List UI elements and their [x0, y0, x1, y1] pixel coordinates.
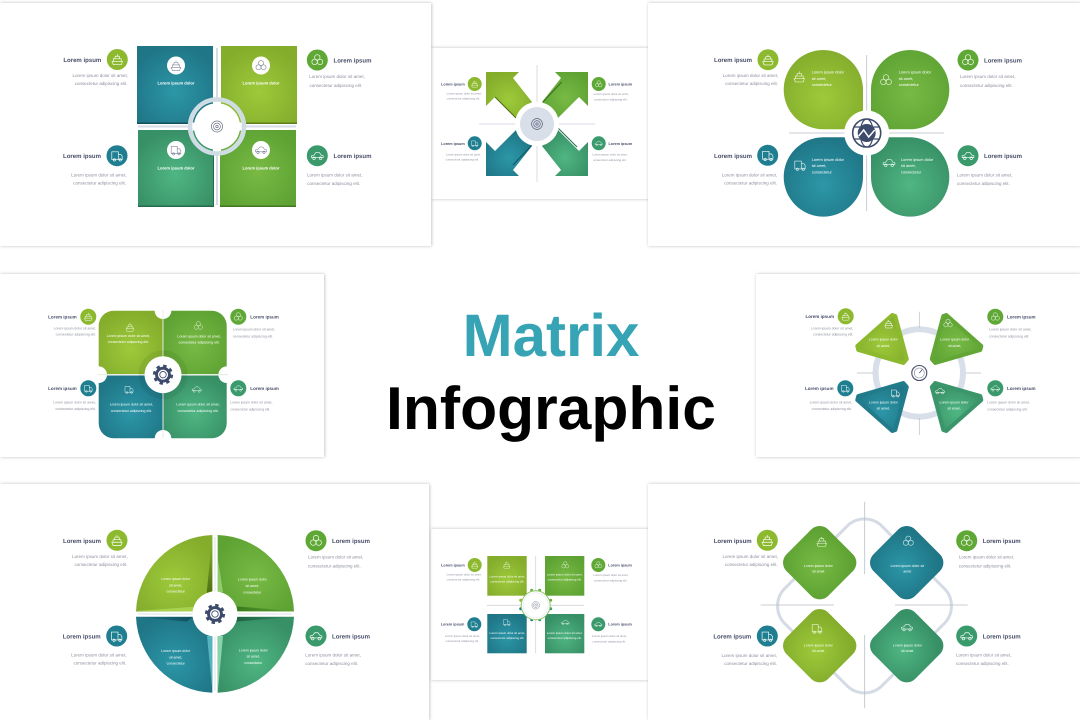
label: bottom right: consectetur adipiscing elit.: [593, 158, 627, 162]
block: teal bottom left: Lorem ipsum dolor sit amet,: [110, 402, 153, 406]
block: green top right: [164, 311, 227, 374]
square: green bottom right: [220, 130, 296, 207]
block: lime top left: Lorem ipsum dolor sit amet,: [107, 334, 150, 338]
block: lime top left: [99, 311, 162, 374]
petal: lime top left: [784, 50, 863, 129]
quadrant: lime top left: Lorem ipsum dolor: [161, 577, 191, 581]
label: bottom left: Lorem ipsum: [441, 623, 465, 627]
square: top left: Lorem ipsum dolor sit amet,: [489, 574, 525, 578]
arrow diagram: [486, 72, 588, 176]
triangle: teal bottom left: Lorem ipsum dolor: [869, 400, 899, 404]
label: top right: Lorem ipsum: [608, 82, 633, 86]
label: top right: consectetur adipiscing elit.: [310, 83, 362, 88]
label: bottom left: Lorem ipsum dolor sit amet,: [446, 152, 481, 156]
label: bottom left: consectetur adipiscing elit.: [724, 661, 777, 666]
quadrant: mint bottom right: consectetur: [244, 661, 263, 665]
label: top left: consectetur adipiscing elit.: [813, 332, 853, 336]
label: top right: [592, 77, 633, 102]
label: bottom left: consectetur adipiscing elit.: [55, 407, 96, 411]
diamond: mint bottom right: sit amet: [901, 649, 913, 653]
label: bottom right: Lorem ipsum dolor sit amet,: [987, 400, 1030, 404]
label: top right: Lorem ipsum: [984, 58, 1022, 64]
label: top left: Lorem ipsum: [441, 563, 465, 567]
square: teal top left: Lorem ipsum dolor: [157, 80, 195, 86]
axis lines: [479, 65, 595, 182]
label: top left: consectetur adipiscing elit.: [56, 332, 96, 336]
label: top left: consectetur adipiscing elit.: [447, 578, 480, 582]
block: teal bottom left: consectetur adipiscing elit.: [111, 409, 152, 413]
label: top right: Lorem ipsum: [1007, 314, 1036, 320]
diamond: lime bottom left: Lorem ipsum dolor: [804, 644, 834, 648]
quadrant: green top right: sit amet,: [246, 584, 259, 588]
square: teal top left: [137, 46, 213, 124]
label: bottom left: Lorem ipsum dolor sit amet,: [722, 172, 777, 178]
block: mint bottom right: [164, 376, 227, 438]
quadrant: mint bottom right: sit amet,: [247, 655, 260, 659]
label: top right: Lorem ipsum: [983, 538, 1021, 545]
triangle: lime top left: [857, 315, 907, 363]
petal: mint bottom right: Lorem ipsum dolor: [901, 157, 934, 162]
label: top left: Lorem ipsum dolor sit amet,: [723, 73, 778, 78]
label: bottom right: [230, 380, 279, 412]
triangle: green top right: Lorem ipsum dolor: [940, 338, 970, 342]
petal: mint bottom right: [871, 137, 949, 217]
frame and axis lines: [761, 502, 968, 708]
label: top left: Lorem ipsum dolor sit amet,: [447, 92, 482, 96]
center ring: [138, 48, 296, 205]
label: top left: consectetur adipiscing elit.: [75, 81, 128, 86]
label: top left: Lorem ipsum: [441, 82, 465, 86]
triangle: lime top left: Lorem ipsum dolor: [869, 338, 899, 342]
label: top right: Lorem ipsum dolor sit amet,: [959, 554, 1014, 560]
label: bottom right: Lorem ipsum: [608, 623, 633, 627]
label: bottom right: consectetur adipiscing elit.: [592, 640, 626, 644]
label: top left: consectetur adipiscing elit.: [725, 81, 778, 86]
label: bottom right: Lorem ipsum dolor sit amet,: [592, 634, 627, 638]
label: top left: Lorem ipsum dolor sit amet,: [447, 572, 482, 576]
petal: lime top left: sit amet,: [812, 76, 826, 81]
label: top right: [958, 50, 1022, 88]
quadrant: green top right: [218, 535, 294, 612]
label: bottom right: Lorem ipsum: [983, 634, 1021, 641]
label: bottom left: [713, 626, 778, 666]
label: top right: [591, 558, 633, 582]
title: [386, 302, 716, 442]
petal: mint bottom right: consectetur: [901, 170, 922, 174]
square: bottom right: consectetur adipiscing elit.: [548, 636, 582, 640]
axis lines: [789, 55, 944, 211]
title: Matrix: [463, 302, 639, 369]
label: top left: Lorem ipsum: [63, 538, 101, 545]
label: top right: consectetur adipiscing elit.: [308, 564, 361, 568]
label: top right: consectetur adipiscing elit.: [594, 578, 628, 582]
label: bottom right: consectetur adipiscing elit.: [987, 408, 1028, 412]
triangle: teal bottom left: sit amet,: [877, 406, 890, 410]
label: top right: Lorem ipsum dolor sit amet,: [309, 74, 365, 79]
quadrant: teal bottom left: sit amet,: [169, 655, 182, 659]
square: bottom left: [487, 614, 527, 653]
panel: notched rounded matrix with gear: [0, 274, 324, 457]
label: bottom right: consectetur adipiscing elit.: [956, 661, 1009, 666]
quadrant: teal bottom left: [136, 617, 212, 693]
label: bottom right: Lorem ipsum dolor sit amet,: [957, 172, 1013, 178]
label: top left: Lorem ipsum: [63, 57, 101, 64]
square: top right: consectetur adipiscing elit.: [548, 578, 582, 582]
triangle: green top right: [932, 315, 981, 363]
label: top right: Lorem ipsum: [250, 314, 279, 320]
label: top left: Lorem ipsum: [714, 538, 752, 545]
petal: green top right: consectetur: [899, 82, 920, 87]
label: top right: consectetur adipiscing elit.: [233, 334, 273, 338]
triangle: mint bottom right: Lorem ipsum dolor: [940, 400, 969, 404]
label: top right: Lorem ipsum dolor sit amet,: [594, 573, 629, 577]
label: top right: consectetur adipiscing elit.: [960, 83, 1013, 88]
square: bottom left: consectetur adipiscing elit.: [490, 636, 524, 640]
label: top right: Lorem ipsum: [334, 58, 371, 64]
label: bottom right: Lorem ipsum dolor sit amet,: [956, 652, 1012, 658]
label: bottom right: Lorem ipsum dolor sit amet,: [307, 172, 363, 178]
label: bottom left: consectetur adipiscing elit.: [73, 180, 126, 186]
label: bottom right: Lorem ipsum: [984, 153, 1022, 160]
label: bottom left: consectetur adipiscing elit.: [446, 639, 479, 643]
quadrant: mint bottom right: Lorem ipsum dolor: [239, 648, 269, 652]
label: bottom left: Lorem ipsum dolor sit amet,: [445, 634, 480, 638]
label: bottom left: [48, 380, 96, 411]
petal: green top right: [871, 50, 949, 129]
center gear: [138, 537, 292, 691]
notches and cross lines: [90, 302, 235, 447]
petal: teal bottom left: Lorem ipsum dolor: [812, 157, 845, 162]
square: mint bottom left: Lorem ipsum dolor: [157, 166, 195, 170]
label: bottom left: Lorem ipsum dolor sit amet,: [53, 400, 96, 404]
quadrant: lime top left: sit amet,: [169, 583, 182, 587]
label: bottom right: Lorem ipsum: [250, 386, 279, 391]
square: lime top right: Lorem ipsum dolor: [242, 80, 280, 86]
diamond: green top left: [778, 521, 861, 604]
square: top right: Lorem ipsum dolor sit amet,: [547, 572, 583, 576]
label: bottom left: [63, 145, 128, 186]
square: top left: consectetur adipiscing elit.: [490, 580, 524, 584]
label: top left: Lorem ipsum: [805, 314, 834, 319]
label: top right: [306, 530, 370, 568]
label: bottom left: Lorem ipsum: [714, 153, 752, 160]
label: top right: Lorem ipsum: [608, 563, 633, 567]
label: bottom right: consectetur adipiscing elit.: [230, 408, 270, 412]
label: top left: [714, 49, 778, 86]
label: top right: Lorem ipsum dolor sit amet,: [594, 92, 629, 96]
label: bottom right: Lorem ipsum: [1007, 386, 1036, 391]
center globe: [844, 110, 889, 156]
petal: teal bottom left: [784, 137, 863, 217]
label: bottom right: [307, 145, 371, 186]
label: bottom right: consectetur adipiscing elit.: [957, 181, 1010, 186]
axis lines: [487, 556, 584, 653]
diamond: lime bottom left: [778, 604, 861, 687]
triangle: green top right: sit amet,: [948, 344, 961, 348]
label: top left: [441, 558, 482, 582]
label: top right: consectetur adipiscing elit.: [959, 564, 1011, 568]
diamond: green top left: sit amet: [812, 570, 824, 574]
diamond: mint bottom right: Lorem ipsum dolor: [893, 644, 923, 648]
label: bottom right: consectetur adipiscing elit.: [305, 661, 358, 666]
label: top left: Lorem ipsum dolor sit amet,: [54, 326, 96, 330]
quadrant: lime top left: consectetur: [167, 590, 186, 594]
block: green top right: consectetur adipiscing elit.: [178, 340, 220, 344]
quadrant: green top right: Lorem ipsum dolor: [238, 578, 268, 582]
label: bottom left: Lorem ipsum: [63, 634, 101, 640]
petal: lime top left: consectetur: [812, 82, 833, 87]
block: mint bottom right: consectetur adipiscing elit.: [177, 409, 219, 413]
title: Infographic: [386, 374, 716, 442]
label: bottom right: Lorem ipsum: [334, 153, 371, 160]
label: bottom left: Lorem ipsum: [63, 153, 101, 160]
ring and axis ticks: [857, 312, 981, 435]
square: bottom right: Lorem ipsum dolor sit amet,: [547, 631, 583, 635]
label: top left: [63, 49, 128, 86]
label: bottom left: Lorem ipsum: [805, 386, 834, 391]
label: bottom left: [441, 617, 481, 643]
label: bottom left: [63, 626, 127, 666]
block: mint bottom right: Lorem ipsum dolor sit amet,: [176, 402, 220, 406]
petal: teal bottom left: sit amet,: [812, 163, 826, 168]
label: bottom right: [987, 380, 1036, 412]
label: top left: Lorem ipsum dolor sit amet,: [72, 73, 128, 78]
label: top right: [307, 50, 371, 88]
label: bottom left: Lorem ipsum dolor sit amet,: [71, 652, 127, 658]
block: green top right: Lorem ipsum dolor sit amet,: [177, 334, 221, 338]
label: bottom left: [714, 145, 778, 186]
label: bottom left: [805, 380, 853, 411]
quadrant: lime top left: [136, 535, 212, 612]
label: top right: Lorem ipsum dolor sit amet,: [960, 74, 1016, 79]
label: top left: Lorem ipsum: [48, 314, 77, 319]
quadrant: mint bottom right: [218, 617, 294, 693]
square: lime top right: [221, 46, 297, 124]
square: top right: [545, 556, 584, 596]
label: top right: consectetur adipiscing elit.: [594, 98, 628, 102]
label: top right: Lorem ipsum dolor sit amet,: [308, 554, 364, 560]
label: top left: Lorem ipsum dolor sit amet,: [811, 326, 853, 330]
triangle: mint bottom right: [932, 383, 981, 431]
petal: mint bottom right: sit amet,: [901, 163, 916, 168]
label: bottom left: Lorem ipsum: [441, 142, 465, 146]
block: teal bottom left: [99, 376, 162, 438]
diamond: lime bottom left: sit amet: [812, 649, 824, 653]
label: top left: consectetur adipiscing elit.: [447, 96, 480, 100]
label: bottom left: consectetur adipiscing elit.: [446, 158, 479, 162]
label: top left: [441, 77, 482, 100]
label: bottom right: consectetur adipiscing elit.: [307, 181, 360, 186]
label: top left: [48, 309, 96, 336]
label: top right: [956, 530, 1021, 568]
label: top right: Lorem ipsum: [332, 538, 370, 545]
label: bottom left: consectetur adipiscing elit.: [724, 180, 777, 186]
label: top left: consectetur adipiscing elit.: [725, 562, 778, 567]
triangle: lime top left: sit amet,: [877, 344, 890, 348]
label: top right: [230, 309, 279, 338]
label: bottom right: [305, 626, 370, 666]
diamond: teal top right: [865, 521, 948, 604]
triangle: teal bottom left: [857, 383, 907, 431]
petal: green top right: Lorem ipsum dolor: [899, 70, 932, 74]
label: bottom right: Lorem ipsum: [332, 634, 370, 641]
label: top right: [987, 309, 1036, 338]
label: top left: Lorem ipsum dolor sit amet,: [72, 554, 128, 559]
label: bottom right: [957, 145, 1022, 186]
square: top left: [487, 556, 527, 596]
label: top right: consectetur adipiscing elit.: [989, 334, 1029, 338]
label: top left: [63, 530, 128, 567]
label: bottom left: Lorem ipsum dolor sit amet,: [721, 653, 777, 658]
quadrant: green top right: consectetur: [243, 590, 262, 594]
label: bottom right: Lorem ipsum dolor sit amet,: [305, 652, 361, 658]
label: bottom left: Lorem ipsum: [48, 386, 77, 391]
square: bottom right: [545, 614, 584, 653]
square: green bottom right: Lorem ipsum dolor: [242, 166, 280, 170]
panel: small square gear slide: [431, 529, 648, 680]
label: bottom left: Lorem ipsum: [713, 634, 751, 640]
label: bottom right: Lorem ipsum dolor sit amet,: [230, 400, 272, 404]
label: top right: Lorem ipsum dolor sit amet,: [233, 328, 275, 332]
label: bottom left: [441, 136, 482, 162]
petal: teal bottom left: consectetur: [812, 170, 833, 174]
triangle: mint bottom right: sit amet,: [947, 406, 961, 410]
petal: green top right: sit amet,: [899, 76, 913, 81]
label: bottom right: Lorem ipsum dolor sit amet,: [592, 152, 628, 156]
panel: square matrix with ring: [0, 3, 431, 246]
petal: lime top left: Lorem ipsum dolor: [812, 70, 845, 74]
label: top left: [714, 530, 778, 567]
label: top left: consectetur adipiscing elit.: [75, 562, 127, 567]
panel: petal matrix with globe: [648, 3, 1080, 246]
label: bottom right: [592, 136, 633, 162]
label: top left: [805, 308, 854, 336]
square: mint bottom left: [138, 130, 214, 207]
label: top right: Lorem ipsum dolor sit amet,: [989, 328, 1031, 332]
diamond: teal top right: amet: [903, 570, 911, 574]
label: bottom left: consectetur adipiscing elit.: [74, 660, 126, 666]
label: bottom right: [956, 626, 1021, 666]
center gear: [138, 350, 188, 399]
block: lime top left: consectetur adipiscing elit.: [108, 340, 149, 344]
diamond: teal top right: Lorem ipsum dolor sit: [891, 564, 924, 568]
panel: diamond matrix with rounded frame: [648, 484, 1080, 720]
label: bottom left: consectetur adipiscing elit.: [812, 407, 852, 411]
diamond: mint bottom right: [865, 604, 948, 687]
label: top left: Lorem ipsum dolor sit amet,: [722, 554, 778, 559]
diamond: green top left: Lorem ipsum dolor: [804, 564, 834, 568]
quadrant: teal bottom left: consectetur: [167, 662, 186, 666]
center gear: [519, 589, 552, 621]
square: bottom left: Lorem ipsum dolor sit amet,: [489, 631, 525, 635]
label: bottom left: Lorem ipsum dolor sit amet,: [71, 172, 127, 178]
panel: circle quadrant matrix with gear: [0, 484, 429, 720]
label: bottom right: Lorem ipsum: [608, 142, 633, 146]
label: bottom right: [591, 617, 633, 644]
label: bottom left: Lorem ipsum dolor sit amet,: [810, 400, 852, 404]
label: top left: Lorem ipsum: [714, 57, 752, 64]
panel: triangle matrix with ring: [756, 274, 1080, 457]
panel: small arrow matrix slide: [431, 48, 648, 199]
quadrant: teal bottom left: Lorem ipsum dolor: [161, 649, 191, 653]
center target: [912, 366, 927, 380]
